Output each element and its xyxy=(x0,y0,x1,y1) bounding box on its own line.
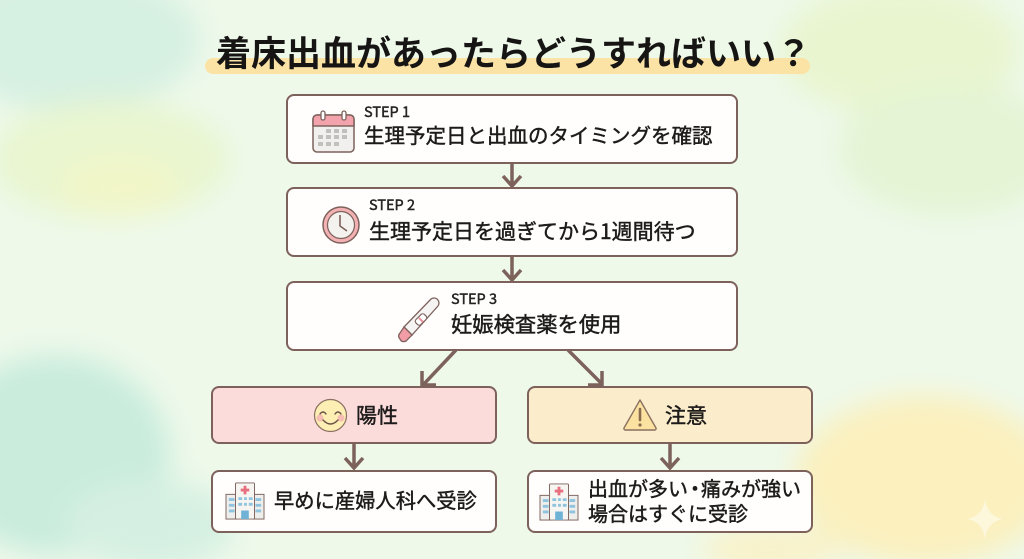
panel: step 3 xyxy=(286,281,738,351)
text: seek care immediately xyxy=(588,478,801,526)
icon: hospital xyxy=(226,482,264,520)
panel: step 2 xyxy=(286,187,738,257)
title highlight xyxy=(205,58,810,74)
icon: hospital xyxy=(540,484,578,520)
text: step 2: 生理予定日を過ぎてから1週間待つ xyxy=(369,216,696,246)
text: step 3: 妊娠検査薬を使用 xyxy=(451,313,621,337)
icon: smiling face xyxy=(314,398,348,432)
title: 着床出血があったらどうすればいい？ xyxy=(216,35,811,74)
panel: step 1 xyxy=(286,94,738,164)
text: caution: 注意 xyxy=(665,405,707,428)
text: see gynecologist: 早めに産婦人科へ受診 xyxy=(274,491,477,513)
text: step 1: 生理予定日と出血のタイミングを確認 xyxy=(364,125,712,148)
panel: seek care immediately xyxy=(527,470,813,533)
label: step 3: STEP 3 xyxy=(451,288,497,309)
text: seek care immediately: 出血が多い・痛みが強い xyxy=(588,479,801,501)
panel: positive xyxy=(211,386,497,444)
text: seek care immediately: 場合はすぐに受診 xyxy=(588,504,748,526)
icon: clock xyxy=(322,206,360,244)
icon: calendar xyxy=(312,110,355,153)
icon: pregnancy test xyxy=(398,297,440,342)
panel: see gynecologist xyxy=(211,470,497,533)
label: step 1: STEP 1 xyxy=(364,101,410,122)
icon: sparkle xyxy=(968,500,1002,538)
text: positive: 陽性 xyxy=(356,405,398,428)
label: step 2: STEP 2 xyxy=(369,194,415,215)
icon: warning triangle xyxy=(623,399,657,431)
panel: caution xyxy=(527,386,813,444)
